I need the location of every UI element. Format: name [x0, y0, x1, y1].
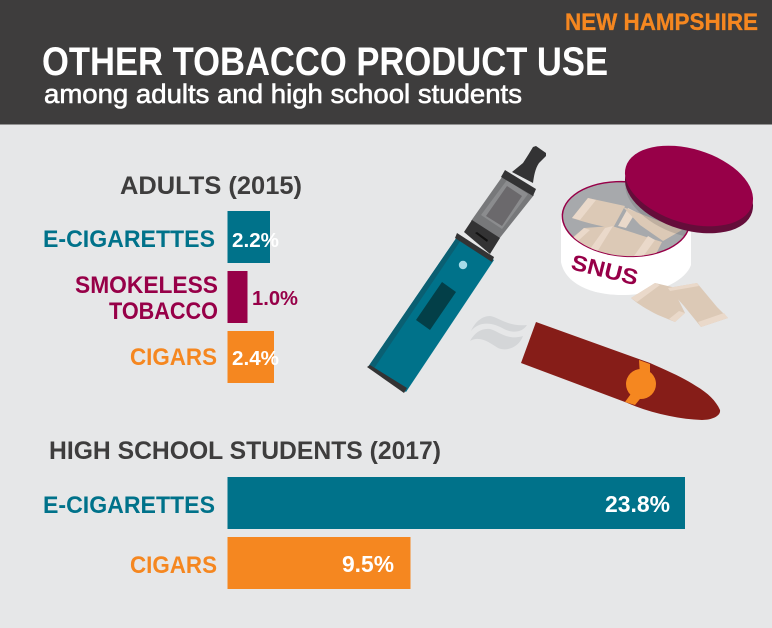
adults cigars row: 2.4%	[232, 347, 279, 370]
header band	[0, 0, 772, 124]
adults smokeless tobacco row: 1.0%	[252, 287, 298, 310]
students cigars row: 9.5%	[342, 551, 394, 577]
students cigars row	[130, 537, 410, 589]
loose pouches	[631, 283, 685, 322]
title: OTHER TOBACCO PRODUCT USE	[42, 40, 608, 84]
adults heading: ADULTS (2015)	[120, 172, 302, 200]
adults e-cigarettes row: 2.2%	[232, 229, 279, 252]
adults e-cigarettes row: E-CIGARETTES	[43, 226, 215, 253]
lid	[615, 138, 763, 248]
adults bar chart	[43, 172, 302, 383]
students e-cigarettes row	[43, 477, 685, 529]
students cigars row: CIGARS	[130, 552, 217, 579]
adults cigars row	[130, 331, 279, 383]
high school students bar chart	[43, 437, 685, 589]
students e-cigarettes row: 23.8%	[605, 491, 670, 517]
subtitle: among adults and high school students	[44, 79, 522, 109]
adults cigars row: CIGARS	[130, 344, 217, 371]
adults smokeless tobacco row	[75, 271, 298, 325]
state label: NEW HAMPSHIRE	[565, 9, 758, 36]
students e-cigarettes row: E-CIGARETTES	[43, 492, 215, 519]
adults smokeless tobacco row: SMOKELESS	[75, 272, 218, 299]
snus label: SNUS	[569, 250, 641, 290]
adults e-cigarettes row	[43, 211, 279, 263]
smoke	[470, 316, 527, 349]
icon: snus tin	[561, 146, 754, 327]
high school heading: HIGH SCHOOL STUDENTS (2017)	[49, 437, 441, 465]
icon: cigar	[470, 316, 720, 420]
icon: e-cigarette	[367, 146, 546, 393]
adults smokeless tobacco row: TOBACCO	[109, 298, 218, 325]
